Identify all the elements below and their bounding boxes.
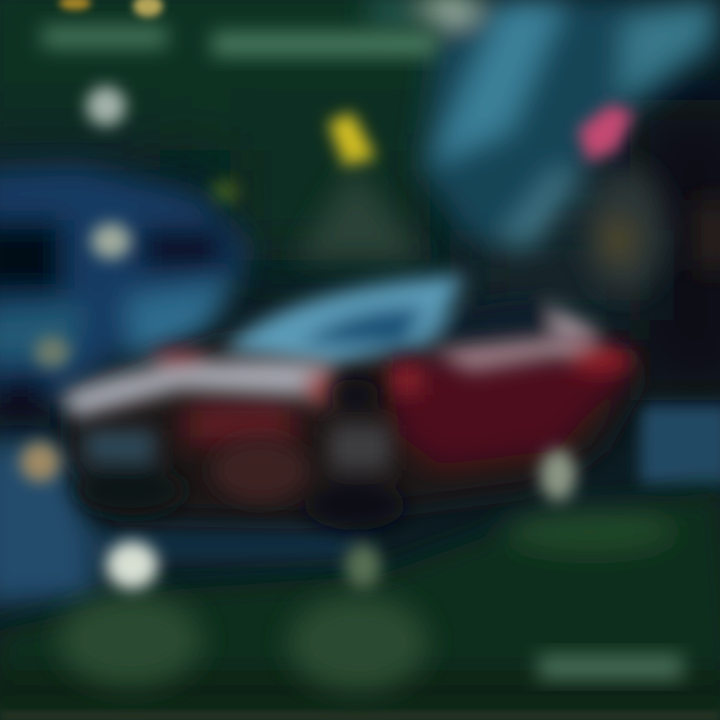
pink marker xyxy=(578,104,634,162)
blurred title xyxy=(42,26,437,56)
top yellow marks xyxy=(59,0,163,17)
blue building facade xyxy=(365,0,720,295)
yellow marker xyxy=(211,112,376,204)
left lower blue ground xyxy=(0,440,360,605)
background foliage xyxy=(0,0,720,400)
blurred bottom-right label xyxy=(538,655,683,679)
glowing white dots xyxy=(20,86,576,589)
car front and wheels xyxy=(75,379,405,530)
car windshield and roof xyxy=(222,275,600,365)
grass mounds xyxy=(58,594,428,691)
car body xyxy=(70,340,640,520)
bottom edge strip xyxy=(0,712,720,720)
tree cone xyxy=(295,165,425,260)
left blue car and arches xyxy=(0,165,250,425)
grass ground xyxy=(0,490,720,720)
car hood and highlights xyxy=(60,332,632,418)
right blue block xyxy=(640,405,720,485)
